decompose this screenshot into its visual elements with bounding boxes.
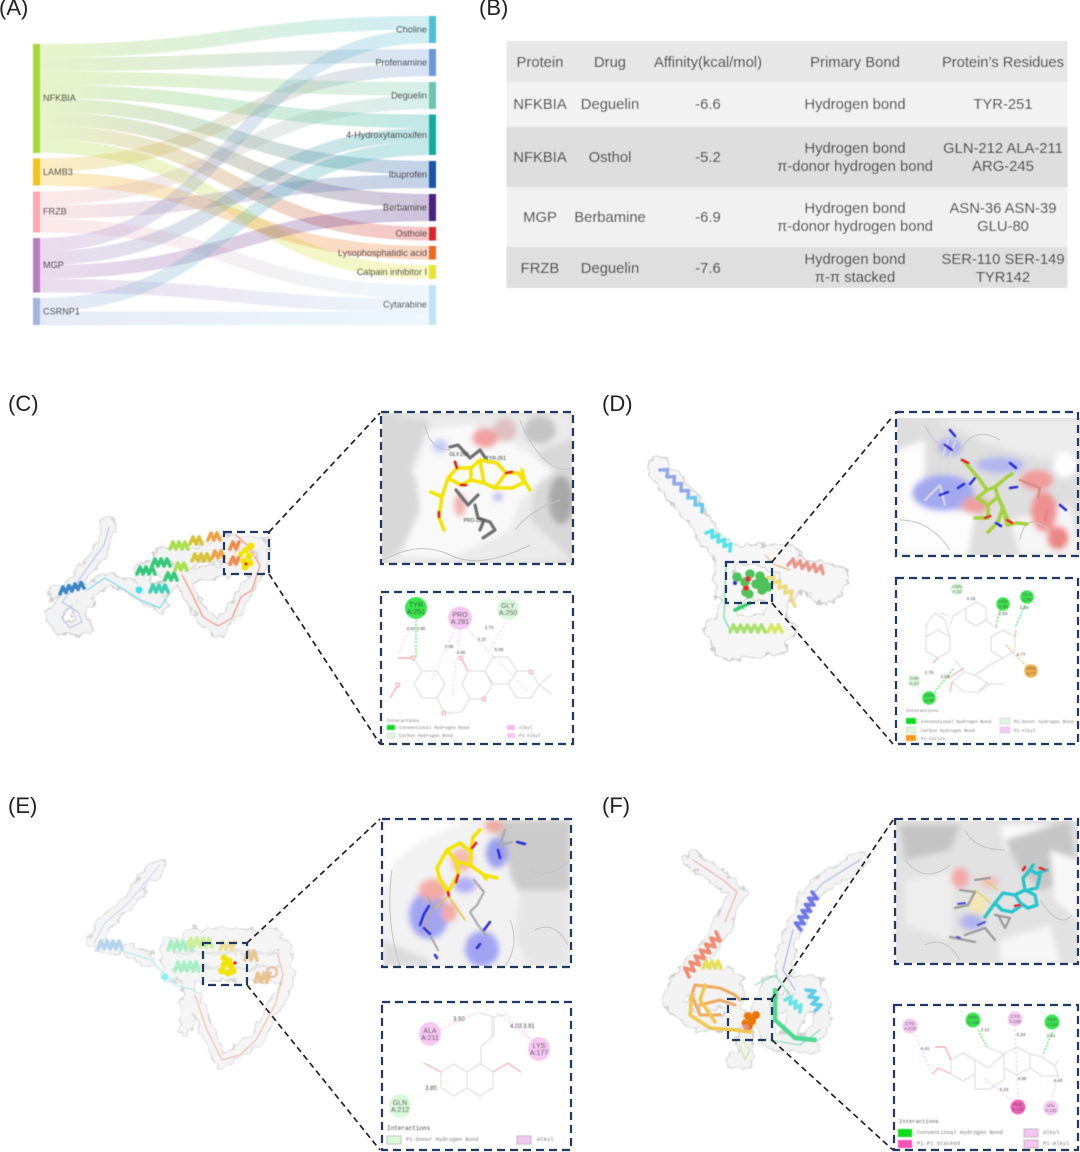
inset D diagram frame xyxy=(896,578,1078,744)
table row: NFKBIA Osthol: ARG-245 xyxy=(972,159,1034,175)
zoom box D xyxy=(726,562,772,603)
sankey target labels: Ibuprofen xyxy=(389,170,427,180)
table row: MGP Berbamine: GLU-80 xyxy=(977,219,1029,235)
molecule F xyxy=(915,1029,1058,1100)
sankey source labels: LAMB3 xyxy=(43,167,73,177)
sankey target labels xyxy=(338,24,427,310)
2D interaction diagram F xyxy=(898,1012,1069,1148)
sankey target labels: Cytarabine xyxy=(383,300,427,310)
inset F: docking pocket xyxy=(896,820,1078,963)
zoom box E xyxy=(203,943,247,985)
residue badges D xyxy=(908,582,1038,705)
legend D: Interactions xyxy=(906,708,939,714)
residue badges D: GLU xyxy=(1022,592,1032,597)
residue badges E: LYS xyxy=(533,1043,546,1050)
legend E: Pi-Donor Hydrogen Bond xyxy=(406,1136,479,1143)
table row: FRZB Deguelin: π-π stacked xyxy=(815,270,895,286)
residue badges F: CYS xyxy=(905,1021,915,1026)
2D interaction diagram C xyxy=(387,597,552,739)
legend D: Pi-Donor Hydrogen Bond xyxy=(1014,719,1074,725)
residue badges F: CYS xyxy=(1010,1014,1020,1019)
sankey target nodes xyxy=(429,16,436,325)
molecule E xyxy=(409,1012,533,1102)
distance labels F: 2.91 xyxy=(1047,1033,1056,1038)
distance labels F: 4.43 xyxy=(1054,1078,1063,1083)
legend D: Conventional Hydrogen Bond xyxy=(921,719,992,725)
sankey target labels: Deguelin xyxy=(391,90,427,100)
table row: FRZB Deguelin: Hydrogen bond xyxy=(804,252,906,268)
table row: NFKBIA Osthol xyxy=(513,141,1063,175)
distance labels C xyxy=(407,625,504,655)
protein structure E xyxy=(94,865,290,1062)
sankey target labels: Lysophosphatidic acid xyxy=(338,248,427,258)
residue badges F: A:210 xyxy=(904,1026,916,1031)
inset C: docking pocket: TYR-251 xyxy=(486,456,506,462)
residue badges D: A:32 xyxy=(952,589,962,594)
table row: FRZB Deguelin: FRZB xyxy=(521,261,559,277)
distance labels E: 3.91 xyxy=(523,1024,535,1030)
legend F xyxy=(898,1118,1069,1148)
inset C diagram frame xyxy=(381,592,573,744)
table row: FRZB Deguelin: TYR142 xyxy=(976,270,1030,286)
residue badges F: A:142 xyxy=(1012,1107,1024,1112)
sankey flows xyxy=(40,23,429,319)
legend C xyxy=(387,718,541,739)
table row: FRZB Deguelin: -7.6 xyxy=(695,261,721,277)
table header: Affinity(kcal/mol) xyxy=(654,55,762,71)
legend F: Interactions xyxy=(899,1118,939,1125)
table header: Protein xyxy=(517,55,563,71)
residue badges E: ALA xyxy=(423,1028,437,1035)
legend C: Carbon Hydrogen Bond xyxy=(399,733,453,739)
residue badges C: A:250 xyxy=(499,610,517,617)
connector lines D xyxy=(772,416,893,744)
inset E diagram frame xyxy=(382,1002,571,1150)
inset C: docking pocket xyxy=(382,413,573,563)
residue badges D: ASN xyxy=(952,584,962,589)
table row: MGP Berbamine: ASN-36 ASN-39 xyxy=(950,201,1056,217)
legend D: Carbon Hydrogen Bond xyxy=(921,728,975,734)
zoom box F xyxy=(728,999,772,1040)
table row: NFKBIA Deguelin: TYR-251 xyxy=(973,97,1033,113)
sankey source labels: CSRNP1 xyxy=(43,306,80,316)
distance labels C: 4.91 2.80 xyxy=(407,626,426,631)
residue badges F: VAL xyxy=(1047,1103,1056,1108)
inset C: docking pocket: GLY-250 xyxy=(449,452,469,458)
distance labels E: 3.50 xyxy=(453,1017,465,1023)
table row: NFKBIA Osthol: Osthol xyxy=(589,150,631,166)
residue badges F: SER xyxy=(968,1015,978,1020)
molecule C xyxy=(390,618,552,715)
residue badges E xyxy=(389,1022,550,1118)
residue badges F: A:149 xyxy=(967,1020,979,1025)
legend F: Alkyl xyxy=(1043,1129,1060,1136)
residue badges F: A:110 xyxy=(1046,1022,1058,1027)
table row: MGP Berbamine: π-donor hydrogen bond xyxy=(777,219,933,235)
residue badges C: TYR xyxy=(409,602,423,609)
distance labels F: 5.24 xyxy=(1017,1032,1026,1037)
table row: MGP Berbamine xyxy=(523,201,1056,235)
inset E: docking pocket xyxy=(383,819,570,967)
distance labels D: 4.15 xyxy=(967,596,976,601)
connector lines E xyxy=(247,819,380,1150)
legend F: Pi-Alkyl xyxy=(1043,1140,1069,1147)
table row: NFKBIA Deguelin: Deguelin xyxy=(581,97,639,113)
residue badges D: A:80 xyxy=(1022,597,1032,602)
legend D: Pi-Cation xyxy=(921,736,946,742)
distance labels E: 3.85 xyxy=(425,1086,437,1092)
protein structure C xyxy=(53,522,262,630)
table row: MGP Berbamine: Hydrogen bond xyxy=(804,201,906,217)
residue badges E: A:212 xyxy=(391,1107,409,1114)
legend E: Interactions xyxy=(387,1125,431,1132)
legend C: Pi-Alkyl xyxy=(519,733,541,739)
residue badges C: PRO xyxy=(452,612,468,619)
table row: MGP Berbamine: MGP xyxy=(523,210,557,226)
table row: NFKBIA Osthol: -5.2 xyxy=(695,150,721,166)
residue badges E: A:177 xyxy=(530,1050,548,1057)
table row: NFKBIA Osthol: π-donor hydrogen bond xyxy=(777,159,933,175)
legend E: Alkyl xyxy=(537,1136,554,1143)
distance labels C: 4.37 xyxy=(478,637,487,642)
legend F: Conventional Hydrogen Bond xyxy=(917,1129,1003,1136)
sankey target labels: Profenamine xyxy=(375,58,427,68)
table row: FRZB Deguelin: SER-110 SER-149 xyxy=(941,252,1065,268)
panel: sankey diagram of proteins to drugs xyxy=(33,16,436,325)
panel label: F: (F) xyxy=(602,793,630,818)
residue badges C: A:251 xyxy=(407,609,425,616)
table row: MGP Berbamine: -6.9 xyxy=(695,210,721,226)
table row: NFKBIA Deguelin: -6.6 xyxy=(695,97,721,113)
residue badges D: THR xyxy=(909,676,919,681)
distance labels D: 2.78 xyxy=(925,670,934,675)
2D interaction diagram D xyxy=(906,582,1074,742)
table row: NFKBIA Osthol: NFKBIA xyxy=(513,150,567,166)
table row: FRZB Deguelin: Deguelin xyxy=(581,261,639,277)
sankey target labels: 4-Hydroxytamoxifen xyxy=(346,130,427,140)
molecule D xyxy=(926,602,1028,695)
panel label: E: (E) xyxy=(8,793,37,818)
distance labels E: 4.03 xyxy=(510,1024,522,1030)
legend C: Interactions xyxy=(387,718,420,724)
sankey target labels: Osthole xyxy=(396,228,427,238)
panel label: C: (C) xyxy=(8,391,39,416)
distance labels C: 4.00 xyxy=(457,650,466,655)
inset D frame xyxy=(896,412,1078,556)
protein structure F xyxy=(670,860,860,1060)
2D interaction diagram E xyxy=(387,1012,554,1144)
table row: NFKBIA Osthol: Hydrogen bond xyxy=(804,141,906,157)
inset F frame xyxy=(895,819,1078,964)
residue badges D: A:77 xyxy=(1026,671,1036,676)
distance labels D: 4.77 xyxy=(1017,652,1026,657)
residue badges F: SER xyxy=(1047,1017,1057,1022)
distance labels F: 3.12 xyxy=(981,1027,990,1032)
distance labels C: 5.06 xyxy=(495,647,504,652)
residue badges E: A:211 xyxy=(421,1035,439,1042)
residue badges E: GLN xyxy=(393,1100,407,1107)
residue badges D: A:36 xyxy=(998,604,1008,609)
sankey source labels: FRZB xyxy=(43,206,67,216)
distance labels F: 4.41 xyxy=(921,1046,930,1051)
table row: FRZB Deguelin xyxy=(521,252,1065,286)
table header: Protein’s Residues xyxy=(942,55,1064,71)
legend E xyxy=(387,1125,554,1144)
distance labels F xyxy=(921,1027,1063,1092)
distance labels D: 2.04 xyxy=(941,674,950,679)
residue badges D: A:39 xyxy=(924,698,934,703)
zoom box C xyxy=(224,532,269,574)
table row: MGP Berbamine: Berbamine xyxy=(574,210,646,226)
inset E frame xyxy=(382,819,571,967)
table header xyxy=(517,55,1064,71)
sankey target labels: Berbamine xyxy=(383,202,427,212)
sankey source nodes xyxy=(33,44,40,325)
legend F: Pi-Pi Stacked xyxy=(917,1140,960,1147)
distance labels D: 2.94 xyxy=(1020,605,1029,610)
table row: NFKBIA Osthol: GLN-212 ALA-211 xyxy=(943,141,1063,157)
residue badges F: A:141 xyxy=(1045,1108,1057,1113)
sankey source labels: MGP xyxy=(43,260,64,270)
residue badges C: A:281 xyxy=(451,619,469,626)
protein structure D xyxy=(658,468,838,650)
residue badges D: ASN xyxy=(924,693,934,698)
distance labels D: 2.53 xyxy=(999,611,1008,616)
table header: Drug xyxy=(594,55,626,71)
table header: Primary Bond xyxy=(810,55,900,71)
inset C frame xyxy=(381,412,573,564)
distance labels D xyxy=(925,596,1029,679)
residue badges C xyxy=(405,597,519,630)
connector lines F xyxy=(772,820,893,1150)
connector lines C xyxy=(269,413,380,744)
inset C: docking pocket: PRO-281 xyxy=(464,518,485,524)
residue badges F: A:108 xyxy=(1009,1019,1021,1024)
residue badges D: ARG xyxy=(1026,666,1036,671)
sankey source labels xyxy=(43,93,80,316)
panel: docking results table xyxy=(506,41,1068,288)
legend C: Conventional Hydrogen Bond xyxy=(399,725,470,731)
residue badges D: ASN xyxy=(998,599,1008,604)
table row: NFKBIA Deguelin: Hydrogen bond xyxy=(804,97,906,113)
sankey source labels: NFKBIA xyxy=(43,93,77,103)
distance labels C: 3.73 xyxy=(485,625,494,630)
legend D xyxy=(906,708,1074,742)
sankey target labels: Choline xyxy=(396,24,427,34)
distance labels F: 4.06 xyxy=(1018,1076,1027,1081)
distance labels E xyxy=(425,1017,535,1092)
residue badges D: A:42 xyxy=(909,681,919,686)
inset D: docking pocket xyxy=(897,418,1080,555)
legend C: Alkyl xyxy=(519,725,533,731)
residue badges C: GLY xyxy=(501,603,515,610)
residue badges F: PHE xyxy=(1013,1102,1023,1107)
distance labels F: 5.23 xyxy=(1000,1087,1009,1092)
sankey target labels: Calpain inhibitor I xyxy=(357,267,427,277)
legend D: Pi-Alkyl xyxy=(1014,728,1036,734)
residue badges F xyxy=(902,1012,1060,1116)
table row backgrounds xyxy=(506,41,1068,288)
table row: NFKBIA Deguelin xyxy=(513,97,1033,113)
table row: NFKBIA Deguelin: NFKBIA xyxy=(513,97,567,113)
inset F diagram frame xyxy=(894,1005,1078,1150)
distance labels C: 4.08 xyxy=(445,644,454,649)
panel label: D: (D) xyxy=(602,391,633,416)
